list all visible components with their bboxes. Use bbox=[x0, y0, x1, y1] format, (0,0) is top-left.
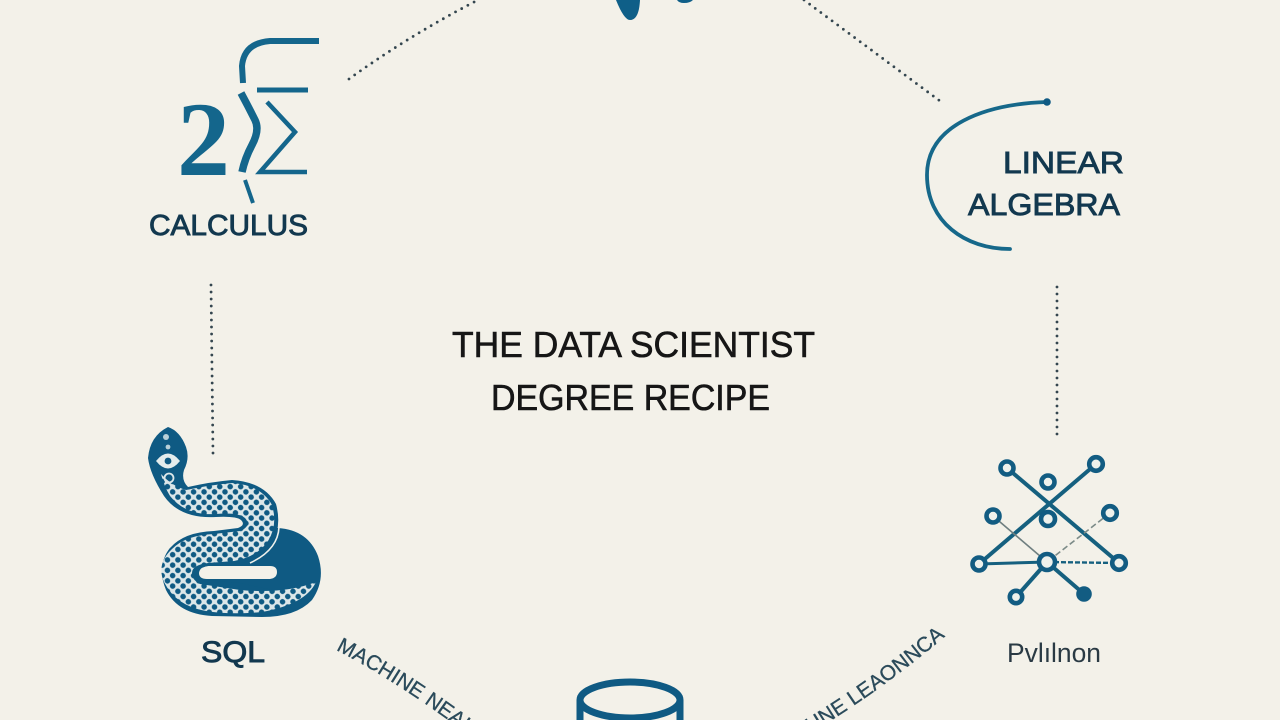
connector: right dotted bbox=[1056, 287, 1058, 437]
icon: calculus symbols bbox=[177, 41, 319, 203]
icon: calculus symbols: 2 bbox=[177, 81, 230, 198]
title bbox=[452, 324, 815, 418]
connector: top-left dotted bbox=[349, 0, 478, 79]
snake lower solid coil bbox=[162, 528, 321, 617]
label: linear algebra: ALGEBRA bbox=[968, 187, 1120, 222]
connector: top-right dotted bbox=[804, 0, 940, 101]
connector: left dotted bbox=[211, 285, 213, 453]
label: linear algebra: LINEAR bbox=[1003, 145, 1124, 180]
title: DEGREE RECIPE bbox=[491, 377, 770, 418]
snake patterned body outline bbox=[148, 427, 300, 616]
label: SQL: SQL bbox=[201, 636, 265, 669]
label: linear algebra bbox=[968, 145, 1124, 222]
icon: snake bbox=[148, 427, 321, 617]
snake coil highlight bbox=[250, 527, 279, 563]
snake scale pattern bbox=[161, 474, 316, 613]
label: calculus: CALCULUS bbox=[149, 210, 308, 242]
icon: network graph bbox=[972, 457, 1126, 603]
icon: cropped top shape bbox=[616, 0, 693, 20]
snake eye bbox=[156, 434, 180, 482]
title: THE DATA SCIENTIST bbox=[452, 324, 815, 365]
icon: linear algebra arc bbox=[927, 98, 1051, 249]
label: Python (distorted): Pvlılnon bbox=[1007, 638, 1101, 668]
icon: database cylinder bbox=[580, 682, 680, 720]
